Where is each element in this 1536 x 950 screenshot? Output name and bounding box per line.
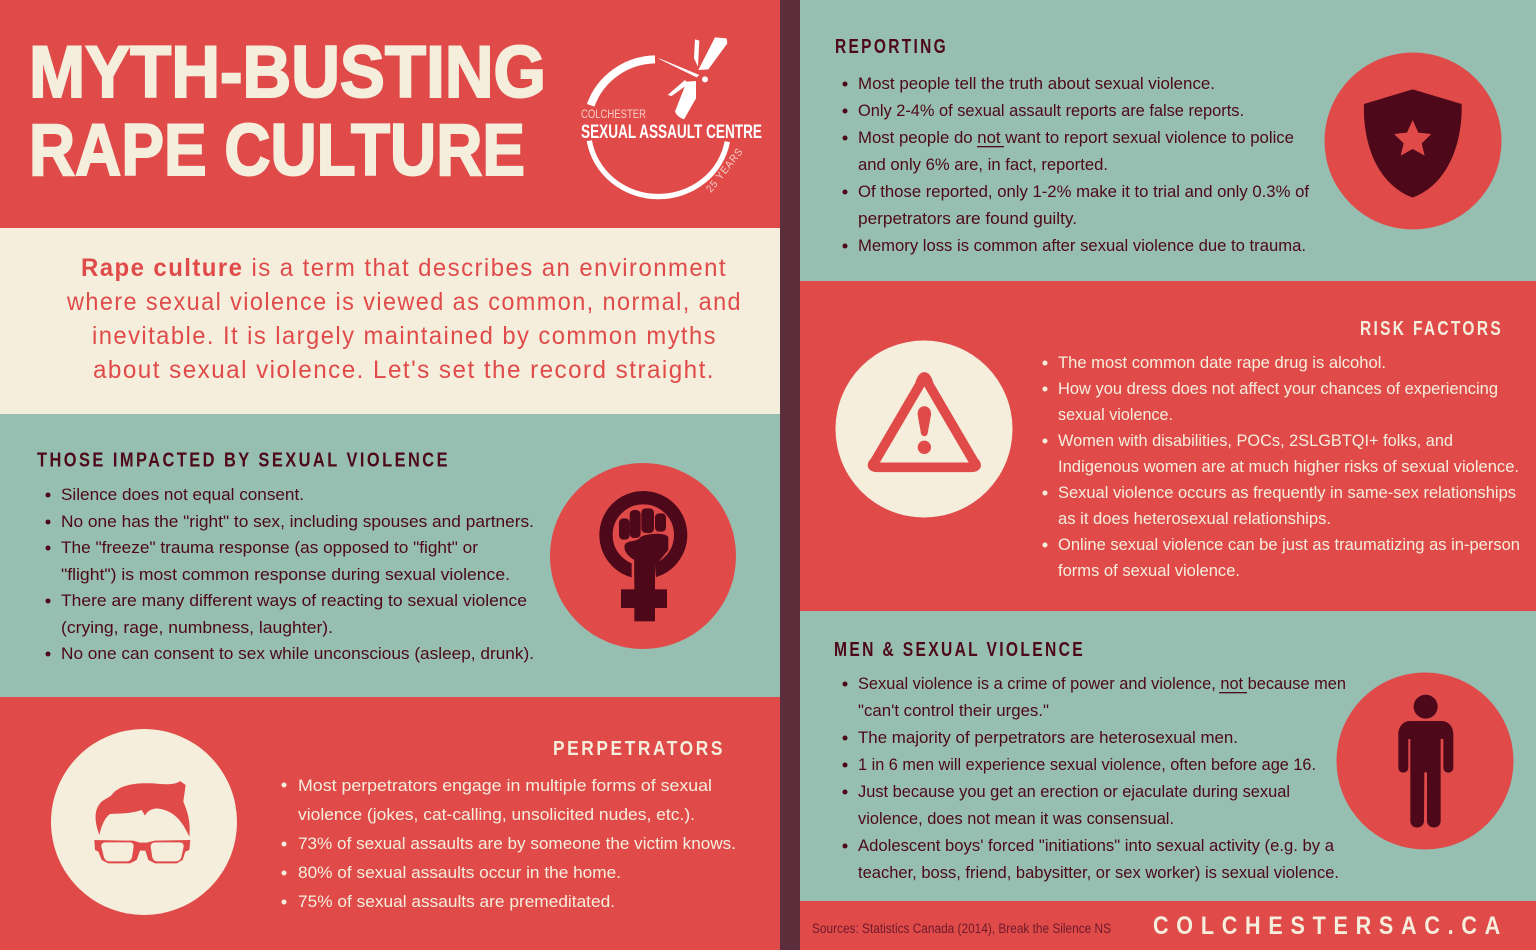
list: risk factors bbox=[1042, 353, 1520, 580]
icon: feminist fist bbox=[550, 463, 736, 649]
icon: warning triangle bbox=[836, 340, 1012, 518]
list: perpetrators bbox=[282, 776, 736, 911]
heading: reporting: REPORTING bbox=[835, 36, 948, 58]
list: risk factors: as it does heterosexual relationships. bbox=[1058, 509, 1331, 528]
logo: Colchester Sexual Assault Centre: COLCHESTER bbox=[581, 109, 646, 121]
list: risk factors: How you dress does not affect your chances of experiencing bbox=[1058, 379, 1498, 398]
list: men and sexual violence: teacher, boss, friend, babysitter, or sex worker) is sexual violence. bbox=[858, 863, 1339, 882]
list: men and sexual violence bbox=[842, 674, 1346, 882]
list: those impacted: No one can consent to sex while unconscious (asleep, drunk). bbox=[61, 644, 534, 663]
logo: Colchester Sexual Assault Centre: SEXUAL ASSAULT CENTRE bbox=[581, 122, 762, 143]
panel: footer bbox=[800, 901, 1536, 950]
icon: face with glasses bbox=[51, 729, 237, 915]
list: risk factors: Sexual violence occurs as frequently in same-sex relationships bbox=[1058, 483, 1516, 502]
list: risk factors: Women with disabilities, POCs, 2SLGBTQI+ folks, and bbox=[1058, 431, 1453, 450]
list: men and sexual violence: Just because you get an erection or ejaculate during sexual bbox=[858, 782, 1290, 801]
list: perpetrators: 75% of sexual assaults are premeditated. bbox=[298, 892, 615, 911]
list: those impacted bbox=[46, 485, 534, 663]
list: risk factors: The most common date rape drug is alcohol. bbox=[1058, 353, 1386, 372]
list: men and sexual violence: Sexual violence is a crime of power and violence, not because men bbox=[858, 674, 1346, 693]
heading: perpetrators: PERPETRATORS bbox=[553, 738, 725, 760]
list: those impacted: No one has the "right" to sex, including spouses and partners. bbox=[61, 512, 534, 531]
list: reporting: Most people tell the truth about sexual violence. bbox=[858, 74, 1215, 93]
list: reporting: Memory loss is common after sexual violence due to trauma. bbox=[858, 236, 1306, 255]
intro text: about sexual violence. Let's set the record straight. bbox=[93, 356, 715, 384]
heading: men and sexual violence: MEN & SEXUAL VIOLENCE bbox=[834, 639, 1085, 661]
list: reporting: Only 2-4% of sexual assault reports are false reports. bbox=[858, 101, 1244, 120]
panel: those impacted bbox=[0, 414, 780, 697]
list: those impacted: The "freeze" trauma response (as opposed to "fight" or bbox=[61, 538, 478, 557]
icon: man figure bbox=[1336, 672, 1514, 850]
sources: Sources: Statistics Canada (2014), Break the Silence NS bbox=[812, 921, 1111, 936]
title: MYTH-BUSTING bbox=[29, 32, 546, 113]
panel: perpetrators bbox=[0, 697, 780, 950]
list: risk factors: forms of sexual violence. bbox=[1058, 561, 1240, 580]
list: those impacted: "flight") is most common response during sexual violence. bbox=[61, 565, 510, 584]
panel: intro definition bbox=[0, 228, 780, 414]
logo: Colchester Sexual Assault Centre: 25 YEARS bbox=[704, 146, 746, 195]
list: perpetrators: violence (jokes, cat-calling, unsolicited nudes, etc.). bbox=[298, 805, 695, 824]
list: men and sexual violence: "can't control their urges." bbox=[858, 701, 1049, 720]
panel: reporting bbox=[800, 0, 1536, 281]
list: perpetrators: 80% of sexual assaults occur in the home. bbox=[298, 863, 621, 882]
list: those impacted: Silence does not equal consent. bbox=[61, 485, 304, 504]
intro text: Rape culture is a term that describes an environment bbox=[81, 254, 727, 282]
list: reporting: Most people do not want to report sexual violence to police bbox=[858, 128, 1294, 147]
intro text: where sexual violence is viewed as common, normal, and bbox=[66, 288, 742, 316]
icon: shield with star bbox=[1324, 52, 1502, 230]
list: risk factors: Indigenous women are at much higher risks of sexual violence. bbox=[1058, 457, 1519, 476]
panel: risk factors bbox=[800, 281, 1536, 611]
list: reporting bbox=[842, 74, 1309, 255]
panel: men and sexual violence bbox=[800, 611, 1536, 901]
list: men and sexual violence: violence, does not mean it was consensual. bbox=[858, 809, 1174, 828]
list: reporting: perpetrators are found guilty. bbox=[858, 209, 1077, 228]
title: RAPE CULTURE bbox=[29, 110, 525, 191]
list: those impacted: (crying, rage, numbness, laughter). bbox=[61, 618, 333, 637]
panel: header bbox=[0, 0, 780, 228]
list: men and sexual violence: The majority of perpetrators are heterosexual men. bbox=[858, 728, 1238, 747]
list: perpetrators: Most perpetrators engage in multiple forms of sexual bbox=[298, 776, 712, 795]
list: reporting: Of those reported, only 1-2% make it to trial and only 0.3% of bbox=[858, 182, 1309, 201]
title bbox=[29, 32, 546, 191]
intro text: inevitable. It is largely maintained by common myths bbox=[92, 322, 717, 350]
list: perpetrators: 73% of sexual assaults are by someone the victim knows. bbox=[298, 834, 736, 853]
list: men and sexual violence: Adolescent boys' forced "initiations" into sexual activity (e.g. by a bbox=[858, 836, 1335, 855]
list: risk factors: Online sexual violence can be just as traumatizing as in-person bbox=[1058, 535, 1520, 554]
list: those impacted: There are many different ways of reacting to sexual violence bbox=[61, 591, 527, 610]
list: men and sexual violence: 1 in 6 men will experience sexual violence, often before age 16. bbox=[858, 755, 1316, 774]
intro text bbox=[66, 254, 742, 384]
list: risk factors: sexual violence. bbox=[1058, 405, 1173, 424]
logo: Colchester Sexual Assault Centre bbox=[581, 37, 762, 197]
heading: those impacted: THOSE IMPACTED BY SEXUAL VIOLENCE bbox=[37, 450, 450, 472]
list: reporting: and only 6% are, in fact, reported. bbox=[858, 155, 1108, 174]
